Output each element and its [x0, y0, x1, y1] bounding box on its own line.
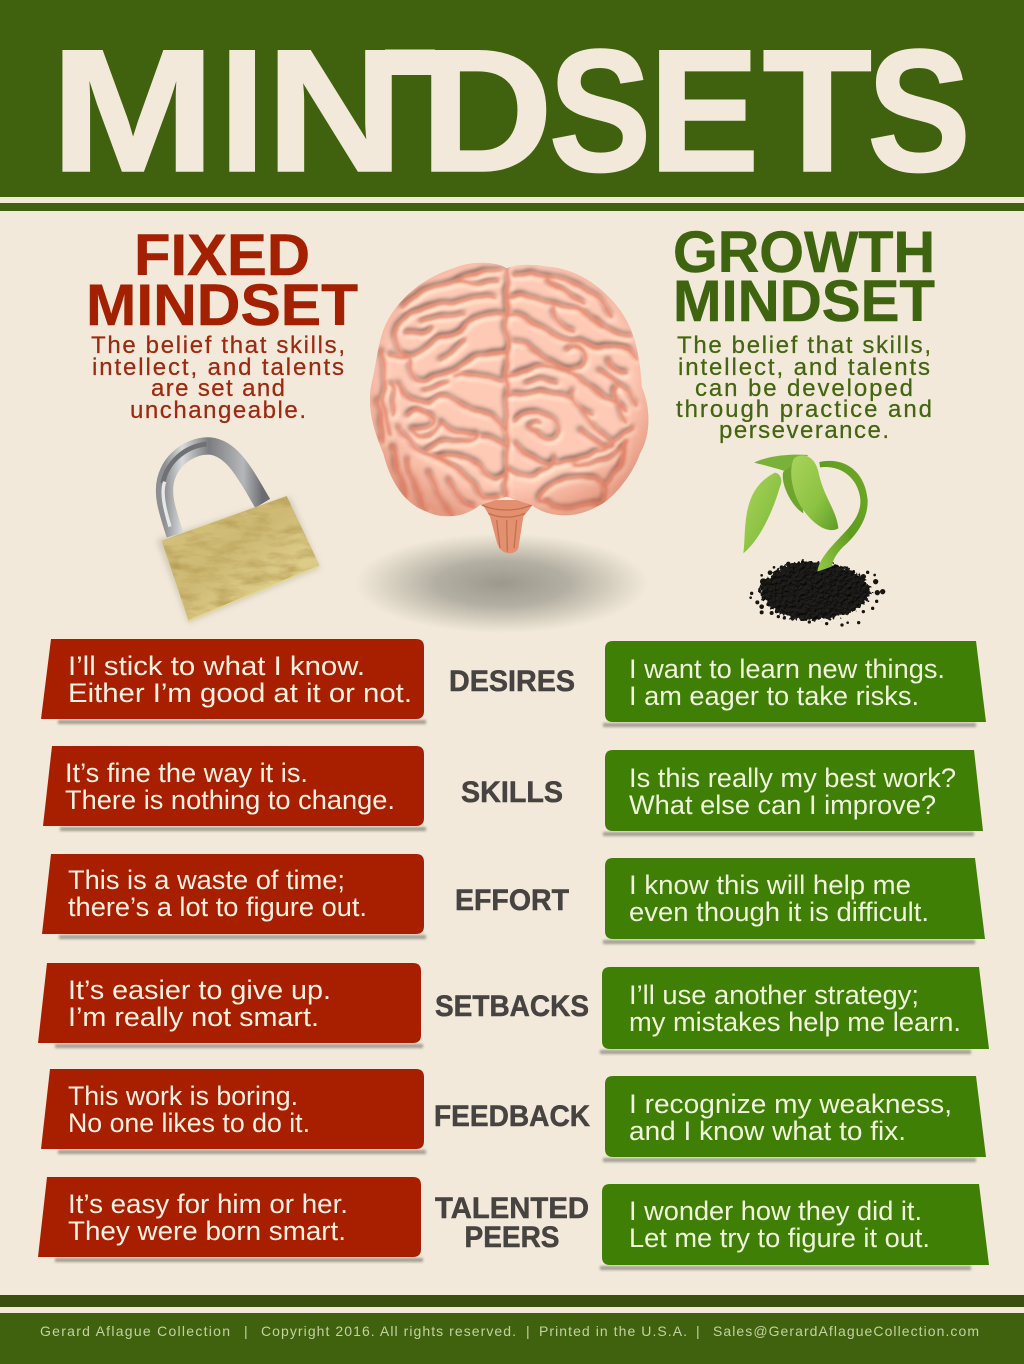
growth: desires: I want to learn new things. — [629, 654, 945, 684]
text: growth mindset definition: can be developed — [695, 375, 913, 402]
text: fixed mindset definition: The belief that skills, — [91, 332, 345, 359]
growth: desires — [605, 641, 986, 722]
fixed: skills — [43, 746, 424, 826]
growth: talented peers: Let me try to figure it out. — [629, 1223, 930, 1253]
growth: feedback — [605, 1076, 986, 1157]
fixed: talented peers: They were born smart. — [68, 1216, 346, 1246]
fixed: skills: There is nothing to change. — [65, 785, 395, 815]
fixed: desires: I’ll stick to what I know. — [68, 651, 365, 681]
title: I — [219, 13, 265, 208]
fixed: setbacks — [38, 963, 421, 1043]
category labels: DESIRES — [449, 665, 575, 698]
growth: setbacks: I’ll use another strategy; — [629, 980, 919, 1010]
fixed: feedback — [41, 1069, 424, 1149]
title: D — [420, 13, 553, 208]
category labels: EFFORT — [455, 884, 569, 917]
title: T — [762, 14, 872, 208]
footer — [0, 1295, 1024, 1364]
title — [50, 13, 971, 208]
text: growth mindset definition: through practice and — [676, 396, 932, 423]
growth: desires: I am eager to take risks. — [629, 681, 919, 711]
growth: effort: I know this will help me — [629, 870, 911, 900]
icon: brain — [366, 262, 648, 630]
text: fixed mindset definition: unchangeable. — [130, 397, 306, 424]
text: fixed mindset definition: intellect, and talents — [92, 354, 344, 381]
heading: fixed mindset: FIXED — [134, 223, 310, 288]
growth: feedback: I recognize my weakness, — [629, 1089, 952, 1119]
fixed: effort: This is a waste of time; — [68, 865, 345, 895]
panel: fixed statements — [38, 639, 426, 1262]
footer: Copyright 2016. All rights reserved. — [261, 1323, 516, 1339]
fixed: effort: there’s a lot to figure out. — [68, 892, 367, 922]
category labels: SKILLS — [461, 776, 563, 809]
category labels: FEEDBACK — [434, 1100, 590, 1133]
heading: fixed mindset — [86, 223, 358, 338]
growth: skills: What else can I improve? — [629, 790, 936, 820]
growth: skills: Is this really my best work? — [629, 763, 956, 793]
icon: sprout in soil — [743, 455, 885, 627]
text: growth mindset definition — [676, 332, 932, 444]
fixed: desires — [41, 639, 424, 719]
text: growth mindset definition: intellect, and talents — [678, 354, 930, 381]
heading: growth mindset: MINDSET — [673, 269, 935, 334]
fixed: talented peers: It’s easy for him or her. — [68, 1189, 348, 1219]
fixed: effort — [42, 854, 424, 934]
heading: fixed mindset: MINDSET — [86, 273, 358, 338]
title: E — [649, 13, 759, 208]
soil — [749, 561, 885, 627]
heading: growth mindset — [673, 220, 935, 334]
heading: growth mindset: GROWTH — [673, 220, 935, 285]
fixed: talented peers — [38, 1177, 421, 1257]
fixed: skills: It’s fine the way it is. — [65, 758, 308, 788]
fixed: setbacks: It’s easier to give up. — [68, 975, 331, 1005]
category labels: SETBACKS — [435, 990, 589, 1023]
fixed: setbacks: I’m really not smart. — [68, 1002, 319, 1032]
text: fixed mindset definition — [91, 332, 345, 424]
growth: setbacks: my mistakes help me learn. — [629, 1007, 961, 1037]
title: M — [50, 13, 216, 208]
fixed: desires: Either I’m good at it or not. — [68, 678, 412, 708]
footer: Printed in the U.S.A. — [539, 1323, 687, 1339]
growth: talented peers — [602, 1184, 989, 1265]
fixed: feedback: No one likes to do it. — [68, 1108, 310, 1138]
growth: setbacks — [602, 967, 989, 1049]
text: growth mindset definition: The belief that skills, — [677, 332, 931, 359]
category labels: PEERS — [464, 1221, 560, 1254]
text: growth mindset definition: perseverance. — [719, 417, 889, 444]
icon: padlock — [157, 444, 320, 623]
footer: Sales@GerardAflagueCollection.com — [713, 1323, 979, 1339]
title: S — [867, 13, 971, 208]
footer: | — [696, 1323, 700, 1339]
title: N — [266, 13, 403, 208]
fixed: feedback: This work is boring. — [68, 1081, 298, 1111]
footer: | — [526, 1323, 530, 1339]
category labels — [434, 665, 590, 1254]
footer: Gerard Aflague Collection — [40, 1323, 230, 1339]
stem — [817, 461, 868, 572]
growth: effort — [605, 858, 985, 939]
growth: skills — [605, 750, 983, 831]
title: S — [549, 14, 651, 208]
footer: | — [244, 1323, 248, 1339]
growth: feedback: and I know what to fix. — [629, 1116, 906, 1146]
category labels: TALENTED — [435, 1192, 589, 1225]
header banner — [0, 0, 1024, 211]
panel: growth statements — [600, 641, 989, 1270]
growth: effort: even though it is difficult. — [629, 897, 929, 927]
growth: talented peers: I wonder how they did it. — [629, 1196, 922, 1226]
text: fixed mindset definition: are set and — [151, 375, 285, 402]
